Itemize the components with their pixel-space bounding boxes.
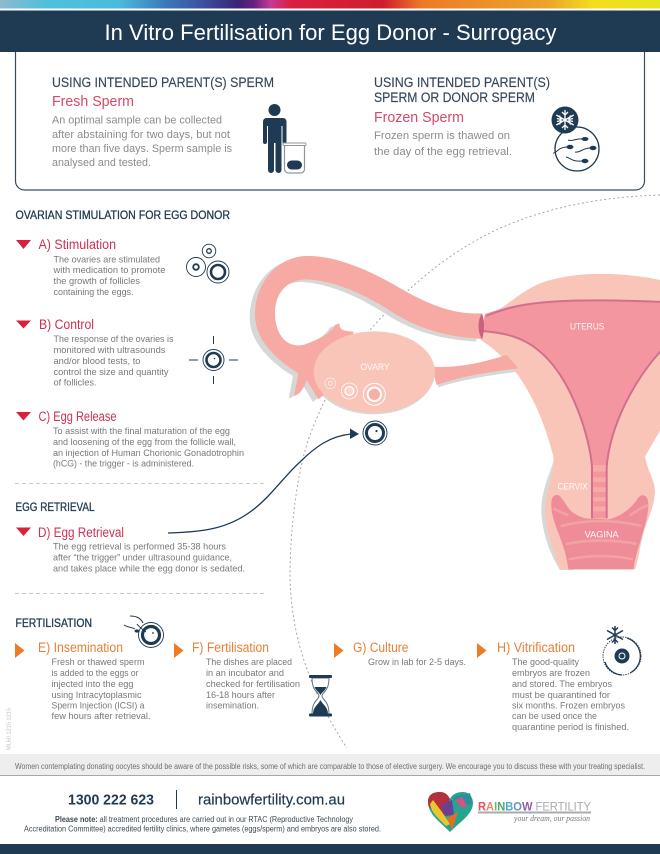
step H: vitrification: quarantine period is finished. bbox=[512, 722, 629, 732]
step F: fertilisation: F) Fertilisation bbox=[192, 640, 269, 655]
step G: culture: G) Culture bbox=[353, 640, 408, 655]
contact details: 1300 222 623 bbox=[68, 792, 154, 808]
step E: insemination: is added to the eggs or bbox=[52, 668, 138, 678]
frozen sperm text: the day of the egg retrieval. bbox=[374, 146, 512, 158]
step F: fertilisation bbox=[174, 640, 300, 710]
step D: egg retrieval: The egg retrieval is performed 35-38 hours bbox=[53, 542, 226, 552]
frozen sperm text: Frozen sperm is thawed on bbox=[374, 130, 510, 142]
uterine cavity bbox=[482, 300, 660, 518]
step H: vitrification: six months. Frozen embryos bbox=[512, 700, 625, 710]
logo heart bbox=[428, 792, 473, 832]
step B: control: and/or blood tests, to bbox=[54, 356, 140, 366]
step D: egg retrieval: D) Egg Retrieval bbox=[38, 525, 124, 540]
step B: control: monitored with ultrasounds bbox=[54, 345, 166, 355]
intro panel bbox=[16, 40, 644, 190]
fresh sperm heading: USING INTENDED PARENT(S) SPERM bbox=[52, 75, 274, 90]
step A: stimulation: with medication to promote bbox=[52, 265, 166, 275]
step D: egg retrieval: after “the trigger” under ultrasound guidance, bbox=[53, 552, 232, 562]
step B: control: B) Control bbox=[39, 317, 94, 332]
step H: vitrification: and stored. The embryos bbox=[512, 679, 612, 689]
step F: fertilisation: in an incubator and bbox=[206, 668, 284, 678]
section heading: fertilisation: FERTILISATION bbox=[16, 618, 92, 630]
step C: egg release: an injection of Human Chorionic Gonadotrophin bbox=[53, 448, 244, 458]
anatomy labels: UTERUS bbox=[570, 322, 604, 332]
step G: culture: Grow in lab for 2-5 days. bbox=[368, 657, 466, 667]
step E: insemination: Fresh or thawed sperm bbox=[52, 657, 145, 667]
step F: fertilisation: checked for fertilisation bbox=[206, 679, 300, 689]
step G: culture bbox=[334, 640, 466, 667]
step B: control: control the size and quantity bbox=[54, 367, 169, 377]
ovary bbox=[314, 331, 435, 413]
step H: vitrification: The good-quality bbox=[512, 657, 579, 667]
anatomy labels: CERVIX bbox=[558, 481, 588, 491]
anatomy labels bbox=[360, 322, 619, 540]
frozen sperm heading: USING INTENDED PARENT(S) bbox=[374, 75, 550, 90]
step B: control bbox=[16, 317, 174, 388]
step F: fertilisation: The dishes are placed bbox=[206, 657, 292, 667]
step E: insemination: few hours after retrieval. bbox=[52, 711, 150, 721]
step F: fertilisation: 16-18 hours after bbox=[206, 690, 275, 700]
fresh sperm text: after abstaining for two days, but not bbox=[52, 129, 230, 141]
uterus body bbox=[481, 274, 660, 569]
anatomy labels: VAGINA bbox=[585, 530, 619, 540]
fresh sperm heading: Fresh Sperm bbox=[52, 93, 134, 110]
arrow: egg retrieval to egg bbox=[168, 428, 359, 533]
fresh sperm heading bbox=[52, 75, 274, 110]
step C: egg release bbox=[16, 409, 244, 468]
step F: fertilisation: insemination. bbox=[206, 700, 259, 710]
document code: ML50 1215 1215 bbox=[6, 708, 12, 750]
please note: Please note: all treatment procedures are carried out in our RTAC (Reproductive Technology bbox=[55, 815, 353, 824]
step E: insemination: injected into the egg bbox=[52, 679, 134, 689]
icon: hourglass bbox=[309, 675, 332, 716]
dotted arc bbox=[290, 195, 660, 748]
title bar bbox=[0, 10, 660, 52]
colour banner bbox=[0, 0, 660, 8]
step C: egg release: (hCG) - the trigger - is administered. bbox=[53, 458, 194, 468]
icon: frozen embryo bbox=[603, 626, 641, 675]
step H: vitrification bbox=[477, 640, 629, 732]
fresh sperm text: more than five days. Sperm sample is bbox=[52, 143, 233, 155]
logo tagline: your dream, our passion bbox=[513, 813, 590, 823]
step B: control: The response of the ovaries is bbox=[54, 334, 174, 344]
step A: stimulation: the growth of follicles bbox=[54, 276, 140, 286]
step H: vitrification: H) Vitrification bbox=[497, 640, 575, 655]
frozen sperm text bbox=[374, 130, 512, 158]
logo wordmark: RAINBOW FERTILITY bbox=[478, 802, 591, 814]
step E: insemination: Sperm Injection (ICSI) a bbox=[52, 700, 145, 710]
icon: frozen sperm bbox=[552, 106, 599, 171]
step E: insemination: E) Insemination bbox=[38, 640, 123, 655]
step D: egg retrieval bbox=[16, 525, 245, 574]
icon: monitored follicle bbox=[189, 336, 238, 384]
icon: released egg bbox=[363, 421, 387, 445]
step D: egg retrieval: and takes place while the egg donor is sedated. bbox=[53, 564, 245, 574]
step E: insemination bbox=[15, 640, 150, 721]
cervix stripes bbox=[593, 465, 606, 511]
frozen sperm heading bbox=[374, 75, 550, 126]
anatomy labels: OVARY bbox=[360, 362, 390, 372]
contact details bbox=[68, 790, 345, 809]
fresh sperm text: analysed and tested. bbox=[52, 157, 151, 169]
frozen sperm heading: SPERM OR DONOR SPERM bbox=[374, 90, 535, 105]
title bar: In Vitro Fertilisation for Egg Donor - Surrogacy bbox=[104, 20, 556, 45]
uterine wall outline bbox=[482, 300, 660, 518]
shadow bbox=[250, 259, 573, 570]
contact details: rainbowfertility.com.au bbox=[198, 792, 345, 808]
logo bbox=[428, 792, 591, 832]
step E: insemination: using Intracytoplasmic bbox=[52, 690, 142, 700]
icon: man with sample jar bbox=[263, 104, 306, 173]
step A: stimulation bbox=[16, 237, 166, 297]
section heading: ovarian stimulation: OVARIAN STIMULATION FOR EGG DONOR bbox=[16, 210, 230, 222]
step A: stimulation: A) Stimulation bbox=[38, 237, 116, 252]
ovarian ligament bbox=[432, 355, 518, 385]
step A: stimulation: containing the eggs. bbox=[54, 287, 134, 297]
step C: egg release: To assist with the final maturation of the egg bbox=[53, 426, 230, 436]
tube junction bbox=[478, 313, 484, 339]
step H: vitrification: must be quarantined for bbox=[512, 690, 610, 700]
step C: egg release: and loosening of the egg from the follicle wall, bbox=[53, 437, 236, 447]
please note: Accreditation Committee) accredited fertility clinics, where gametes (eggs/sperm) and embryos are also stored. bbox=[24, 824, 381, 834]
icon: growing follicles bbox=[186, 244, 229, 283]
step B: control: of follicles. bbox=[54, 378, 96, 388]
step H: vitrification: can be used once the bbox=[512, 711, 597, 721]
frozen sperm heading: Frozen Sperm bbox=[374, 109, 464, 126]
icon: sperm entering egg bbox=[124, 616, 164, 648]
footer bar bbox=[0, 844, 660, 854]
step C: egg release: C) Egg Release bbox=[38, 409, 116, 424]
fresh sperm text: An optimal sample can be collected bbox=[52, 114, 222, 126]
step A: stimulation: The ovaries are stimulated bbox=[54, 254, 160, 264]
risk disclaimer bar bbox=[0, 754, 660, 776]
step H: vitrification: embryos are frozen bbox=[512, 668, 590, 678]
please note bbox=[24, 815, 381, 834]
vagina bbox=[551, 495, 648, 569]
reproductive anatomy diagram bbox=[250, 256, 660, 570]
fresh sperm text bbox=[52, 114, 233, 169]
section heading: egg retrieval: EGG RETRIEVAL bbox=[16, 502, 95, 514]
fallopian tube bbox=[255, 256, 482, 399]
